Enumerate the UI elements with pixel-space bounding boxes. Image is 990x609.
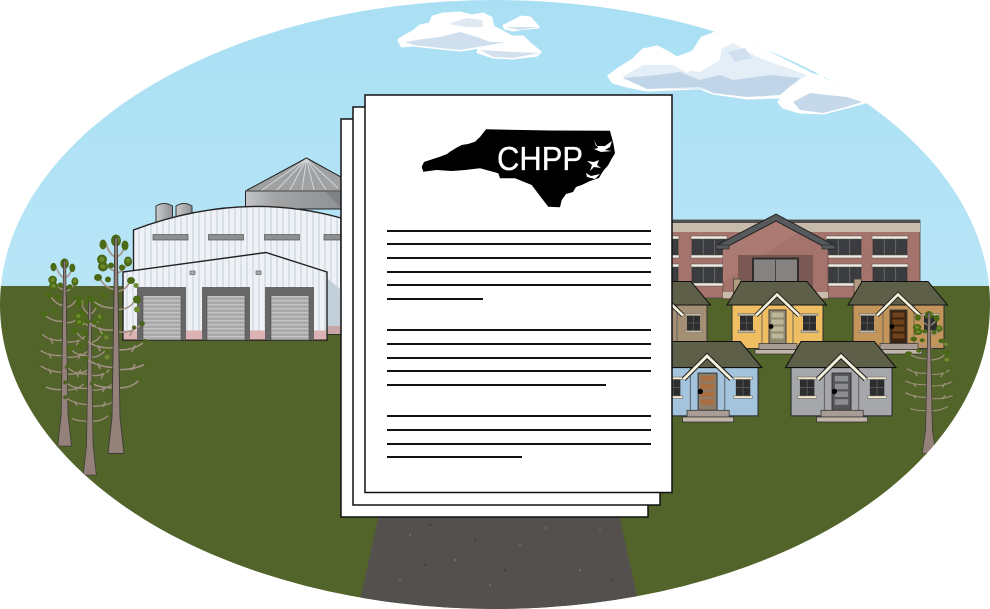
house: orange brown [848, 282, 948, 354]
house: blue [672, 341, 763, 422]
middle page [353, 107, 660, 505]
loading doors [137, 287, 314, 340]
back page [341, 119, 648, 517]
clouds upper right [609, 32, 865, 113]
house: yellow [727, 282, 826, 354]
sky [0, 0, 990, 287]
document stack [341, 95, 672, 517]
house: tan [672, 281, 712, 341]
exhaust stacks [156, 204, 192, 222]
grass ground [0, 286, 990, 609]
chimneys [734, 279, 862, 358]
clouds upper left [399, 13, 540, 58]
front page [365, 95, 672, 492]
front wing [123, 252, 327, 340]
pine tree right [901, 311, 957, 453]
factory [123, 158, 342, 340]
pine tree 1 [37, 258, 92, 446]
house: grey [786, 342, 896, 422]
paragraph 2 lines [387, 330, 651, 385]
school entrance [716, 218, 835, 299]
paragraph 3 lines [387, 416, 651, 457]
pine tree 2 [63, 296, 116, 475]
logo text: CHPP [497, 140, 583, 177]
main building [134, 206, 341, 334]
paragraph 1 lines [387, 231, 651, 299]
school windows [643, 236, 908, 286]
silo [246, 158, 342, 209]
North Carolina map logo [422, 129, 615, 207]
pine tree 3 [84, 234, 148, 454]
upper vents [153, 234, 341, 240]
school building [643, 218, 920, 358]
road [358, 510, 640, 609]
